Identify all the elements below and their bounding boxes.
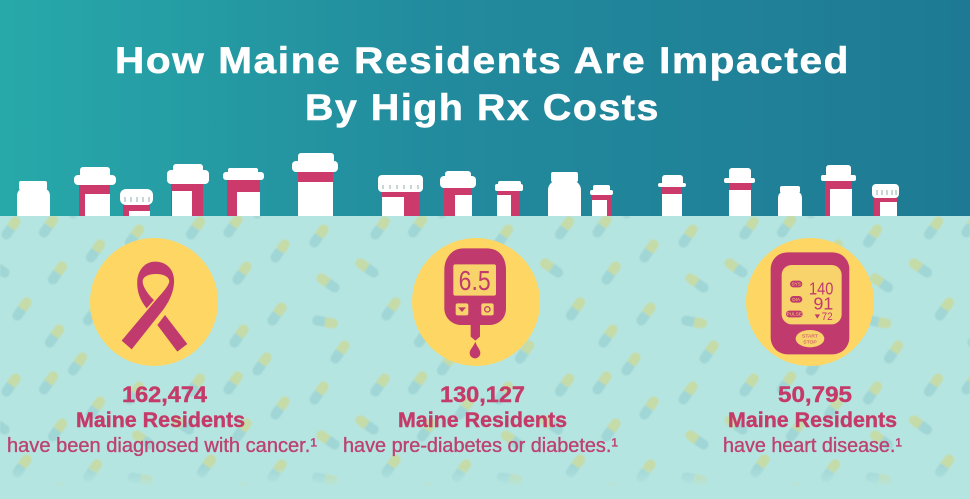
header background xyxy=(0,0,970,216)
stat: cancer xyxy=(7,382,317,457)
stat: cancer: have been diagnosed with cancer.¹ xyxy=(7,435,317,457)
icon: blood pressure monitor: 72 xyxy=(822,311,833,323)
bottle 11 xyxy=(590,185,613,216)
title: How Maine Residents Are Impacted xyxy=(115,40,850,81)
panel: heart disease xyxy=(723,238,902,457)
icon: blood pressure monitor: 140 xyxy=(809,278,833,298)
bottle 4 xyxy=(167,164,209,216)
stat: heart disease: 50,795 xyxy=(778,382,852,407)
bottle 9 xyxy=(495,181,523,216)
stat: diabetes: have pre-diabetes or diabetes.¹ xyxy=(343,435,618,457)
bottle 14: white jar xyxy=(778,186,802,216)
icon: blood pressure monitor: 91 xyxy=(813,293,833,313)
bottle 12 xyxy=(658,175,686,216)
icon: glucose meter: 6.5 xyxy=(459,265,491,296)
stat: diabetes xyxy=(343,382,618,457)
stat: heart disease xyxy=(723,382,902,457)
title: By High Rx Costs xyxy=(305,87,660,128)
icon: blood pressure monitor: START xyxy=(802,334,818,340)
icon: blood pressure monitor: SYS xyxy=(791,282,801,287)
title xyxy=(115,40,850,128)
stat: heart disease: Maine Residents xyxy=(728,408,897,432)
lower panel background xyxy=(0,216,970,499)
icon: glucose meter xyxy=(412,238,540,366)
bottle 10: white jar xyxy=(548,172,581,216)
bottle 15 xyxy=(821,165,856,216)
bottle 8 xyxy=(440,171,476,216)
stat: diabetes: 130,127 xyxy=(440,382,525,407)
stat: heart disease: have heart disease.¹ xyxy=(723,435,902,457)
row of medicine bottles xyxy=(17,153,899,216)
bottle 13 xyxy=(724,168,755,216)
icon: blood pressure monitor xyxy=(746,238,874,366)
pill pattern xyxy=(0,216,970,486)
panel: diabetes xyxy=(343,238,618,457)
bottle 3 xyxy=(120,189,153,216)
stat: cancer: Maine Residents xyxy=(76,408,245,432)
bottle 7 xyxy=(378,175,423,216)
bottle 5 xyxy=(223,168,264,216)
icon: blood pressure monitor: DIA xyxy=(792,297,801,302)
panel: cancer xyxy=(7,238,317,457)
icon: blood pressure monitor: STOP xyxy=(803,339,817,345)
bottle 16 xyxy=(872,184,899,216)
bottle 1: white jar xyxy=(17,181,50,216)
bottle 2 xyxy=(74,167,116,216)
icon: awareness ribbon xyxy=(90,238,218,366)
stat: cancer: 162,474 xyxy=(122,382,207,407)
stat: diabetes: Maine Residents xyxy=(398,408,567,432)
bottle 6 xyxy=(292,153,338,216)
icon: blood pressure monitor: PULSE xyxy=(787,312,802,317)
